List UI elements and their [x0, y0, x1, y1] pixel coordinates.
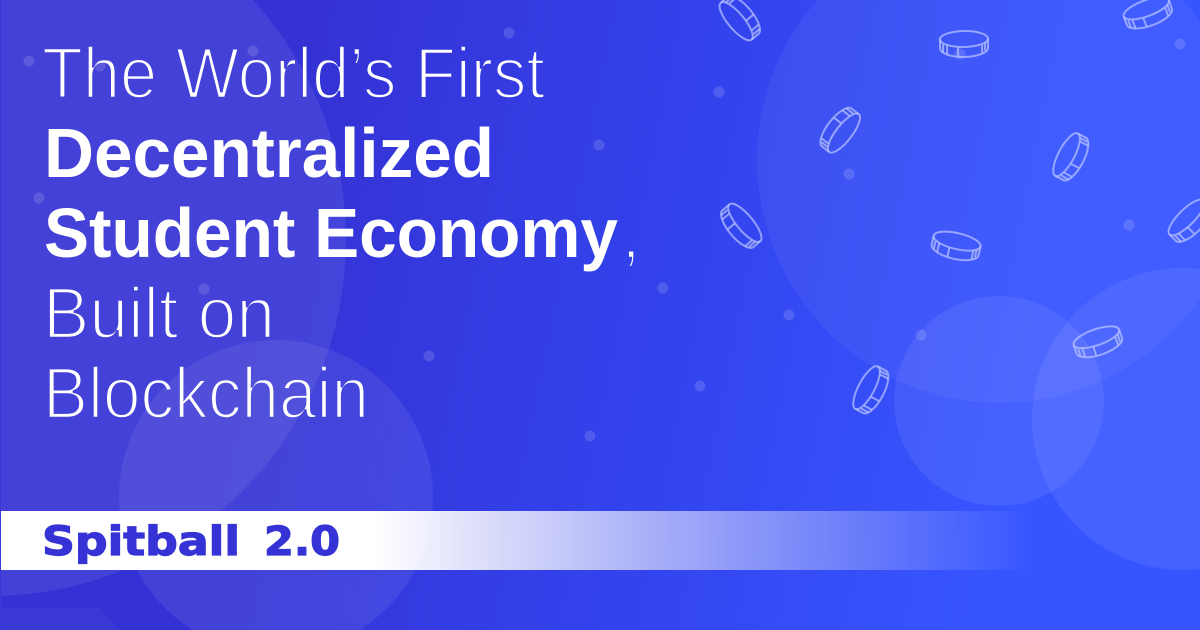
decorative circle: top right [757, 0, 1200, 403]
decorative shape: bottom left corner [1, 608, 120, 630]
background dots [24, 28, 1186, 442]
white fading banner [1, 511, 1030, 570]
logo wordmark: Spitball [42, 519, 240, 565]
headline: Blockchain [43, 354, 369, 434]
headline: Student Economy [44, 194, 618, 272]
decorative circle: lower middle right [894, 296, 1104, 506]
logo wordmark: 2.0 [264, 519, 340, 565]
decorative circle: lower right [1032, 268, 1200, 570]
coins [715, 0, 1200, 417]
headline: Built on [43, 274, 275, 354]
decorative circle: bottom left [119, 340, 433, 630]
headline: , [621, 194, 641, 274]
headline: Decentralized [44, 114, 494, 192]
decorative circle: top left [0, 0, 346, 596]
headline: The World’s First [42, 34, 545, 114]
logo wordmark [42, 519, 340, 565]
headline [42, 34, 641, 434]
